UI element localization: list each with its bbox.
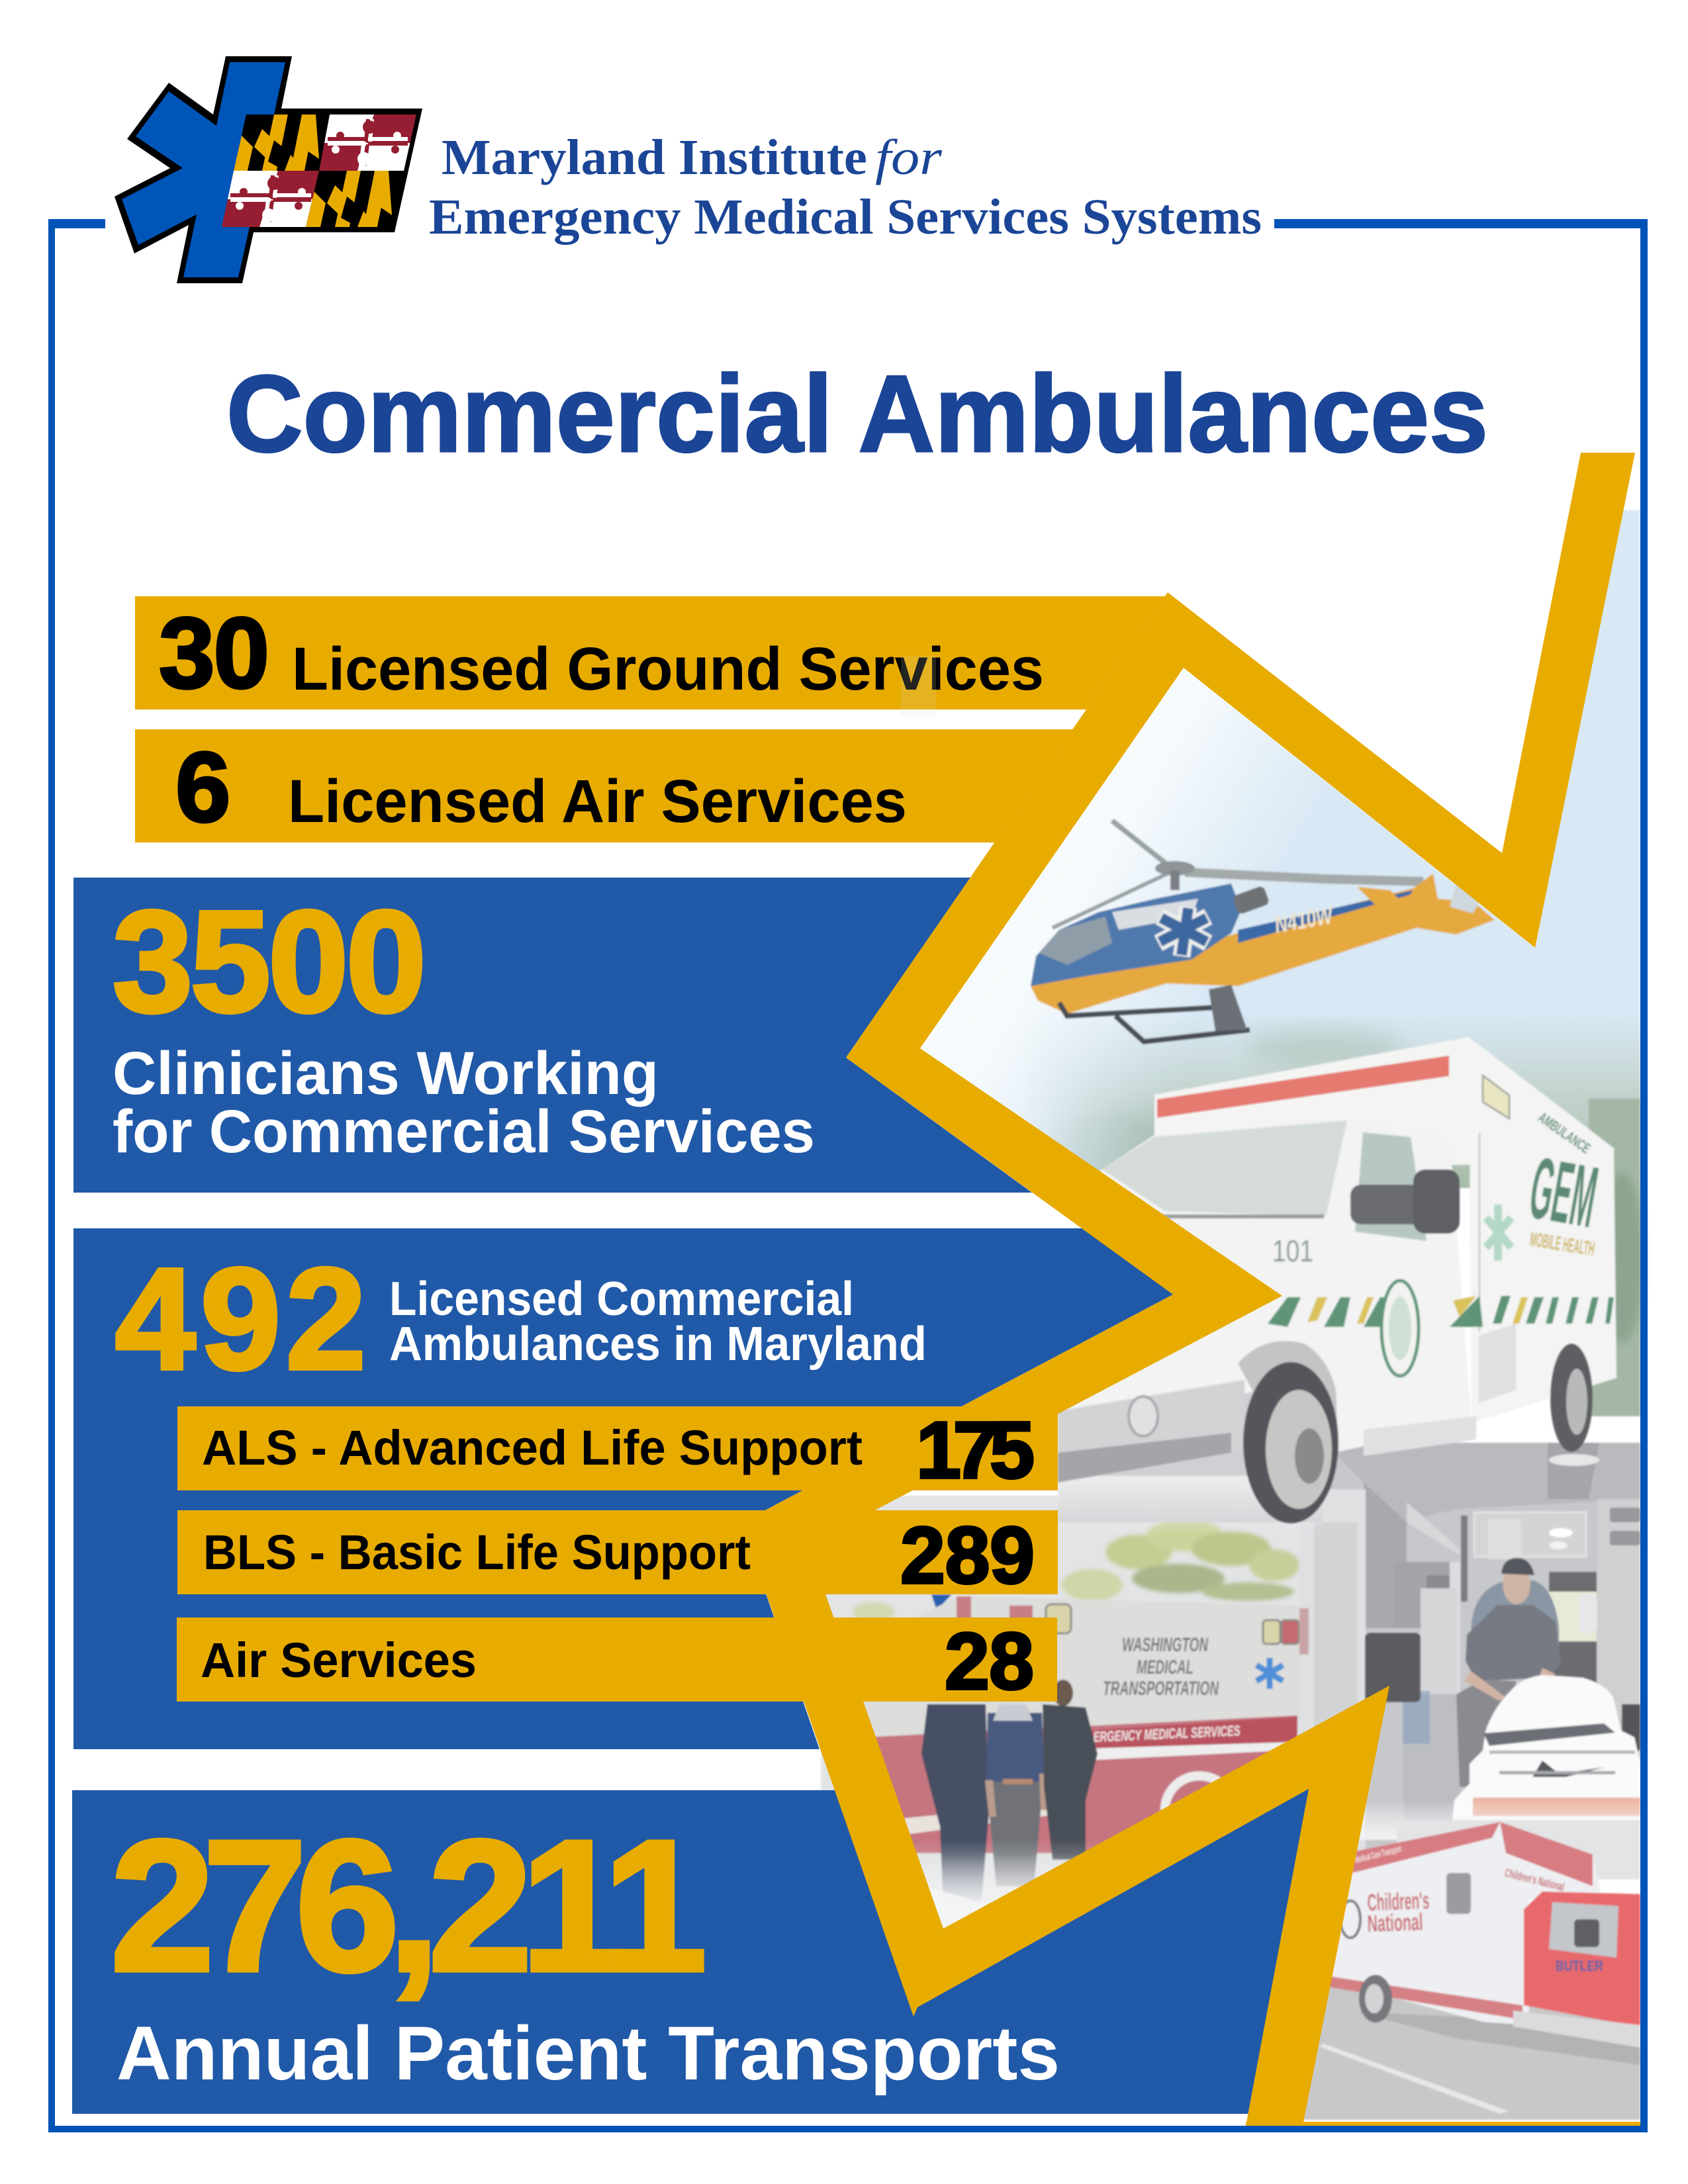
wheel — [1359, 1975, 1392, 2023]
panel: 276,211 patient transports background — [72, 1774, 1324, 2114]
rotor blades — [1053, 821, 1423, 928]
photo: children's national ambulance: Medical Care Transport — [1354, 1843, 1403, 1865]
label: licensed commercial ambulances: Ambulances in Maryland — [389, 1318, 927, 1371]
stat: 30: 30 — [159, 597, 269, 709]
label: licensed ground services: Licensed Ground Services — [292, 635, 1044, 703]
vehicle lettering: TRANSPORTATION — [1103, 1678, 1219, 1700]
treeline behind ambulance — [993, 1016, 1644, 1416]
flag: Crossland quarter bottom left — [222, 171, 319, 227]
photo: washington medical ambulance and crew — [821, 1496, 1304, 1933]
row: air services count — [177, 1616, 1057, 1706]
row: air services count: Air Services — [201, 1633, 477, 1688]
row: BLS count — [177, 1510, 1058, 1600]
landing skids — [1059, 985, 1250, 1042]
vehicle lettering — [1272, 1109, 1604, 1268]
title: Commercial Ambulances — [226, 353, 1488, 475]
medical bag — [1365, 1633, 1421, 1702]
star outline — [115, 56, 422, 283]
row: air services count: 28 — [945, 1616, 1034, 1706]
red light bar — [1157, 1056, 1449, 1118]
tree behind ambulance — [853, 1520, 1299, 1621]
label: clinicians working for commercial services: Clinicians Working — [113, 1040, 659, 1107]
icon: star of life on door — [1486, 1205, 1511, 1261]
crew of three — [914, 1680, 1105, 1913]
photo: ambulance interior with paramedic — [1299, 1443, 1640, 1880]
organization name — [429, 130, 1262, 245]
photo: gem mobile health ambulance: MOBILE HEALTH — [1528, 1228, 1596, 1260]
photo collage background — [821, 510, 1644, 2120]
vehicle lettering: WASHINGTON — [1122, 1634, 1209, 1656]
icon: star of life on helicopter — [1158, 907, 1208, 956]
panel: 492 licensed ambulances background — [73, 1228, 1173, 1749]
photo: washington medical ambulance and crew: ERGENCY MEDICAL SERVICES — [1093, 1722, 1241, 1745]
icon: star of life on ambulance — [1256, 1658, 1283, 1689]
flag: Calvert quarter top left — [234, 114, 319, 171]
bottony cross — [328, 119, 408, 165]
panel: licensed air services — [135, 729, 1074, 842]
logo: star of life with Maryland flag — [115, 56, 424, 283]
gold strip along bottom of the frame — [1246, 2122, 1642, 2126]
tail boom and belly in gold — [1031, 874, 1495, 1014]
row: ALS count — [177, 1405, 1058, 1495]
row: ALS count: ALS - Advanced Life Support — [202, 1420, 863, 1475]
organization name: Maryland Institute — [442, 130, 867, 185]
bumper and fog lamp — [1058, 1380, 1244, 1482]
vehicle lettering: AMBULANCE — [1535, 1109, 1593, 1157]
photo: children's national ambulance: BUTLER — [1556, 1958, 1603, 1974]
photo: helicopter — [1031, 821, 1495, 1042]
vehicle lettering: 101 — [1272, 1234, 1313, 1268]
label: clinicians working for commercial services — [113, 1040, 815, 1165]
gold zigzag pulse line — [741, 453, 1635, 2126]
red cab — [1524, 1891, 1640, 2027]
label: annual patient transports: Annual Patient Transports — [117, 2011, 1060, 2096]
green and yellow reflective stripes — [1268, 1296, 1614, 1327]
vehicle lettering — [1367, 1887, 1430, 1937]
windshield — [1102, 1120, 1347, 1216]
photo: gem mobile health ambulance — [1058, 1037, 1617, 1535]
panel: 3500 clinicians background — [73, 878, 1032, 1193]
stretcher with white linens — [1452, 1675, 1640, 1827]
vehicle lettering: MEDICAL — [1137, 1657, 1194, 1678]
row: ALS count: 175 — [916, 1405, 1035, 1495]
door badge — [1382, 1281, 1419, 1376]
panel: licensed ground services — [135, 596, 1166, 715]
panel: patient transports text — [111, 1801, 1060, 2096]
flag: Crossland quarter top right — [319, 114, 416, 171]
stat: 6: 6 — [175, 731, 230, 842]
vehicle lettering — [1103, 1634, 1219, 1700]
side window — [1355, 1132, 1427, 1241]
panel: licensed ambulances text — [115, 1239, 927, 1400]
organization name: Emergency Medical Services Systems — [429, 189, 1262, 245]
translucent artifact over letter v — [901, 656, 936, 715]
rear wheel — [1550, 1343, 1593, 1452]
photo: children's national ambulance: Children's National — [1503, 1866, 1566, 1893]
stat: 492: 492 — [115, 1239, 366, 1400]
panel: clinicians text — [113, 882, 815, 1165]
label: clinicians working for commercial services: for Commercial Services — [113, 1098, 815, 1165]
label: licensed commercial ambulances: Licensed Commercial — [389, 1273, 854, 1326]
vehicle lettering: Children's — [1367, 1887, 1430, 1916]
label: licensed commercial ambulances — [389, 1273, 927, 1371]
row: BLS count: 289 — [900, 1510, 1035, 1600]
photo: helicopter: N410W — [1272, 901, 1336, 938]
row: BLS count: BLS - Basic Life Support — [203, 1525, 751, 1580]
photo: helicopter sky — [920, 510, 1644, 1416]
paramedic seated — [1456, 1558, 1561, 1787]
front wheel — [1238, 1341, 1338, 1524]
vehicle lettering: National — [1367, 1908, 1423, 1937]
label: licensed air services: Licensed Air Services — [288, 768, 907, 835]
flag: Calvert quarter bottom right — [306, 171, 392, 227]
fuselage in blue — [1031, 884, 1241, 986]
photo: children's national ambulance — [1278, 1820, 1640, 2120]
organization name: for — [875, 130, 942, 185]
blue star — [122, 62, 285, 277]
stat: 276,211: 276,211 — [111, 1801, 707, 2010]
stat: 3500: 3500 — [113, 882, 426, 1042]
interior cabinets — [1364, 1482, 1468, 1853]
wing mirror — [1350, 1169, 1460, 1234]
rear side lamps and door — [1483, 1075, 1509, 1118]
